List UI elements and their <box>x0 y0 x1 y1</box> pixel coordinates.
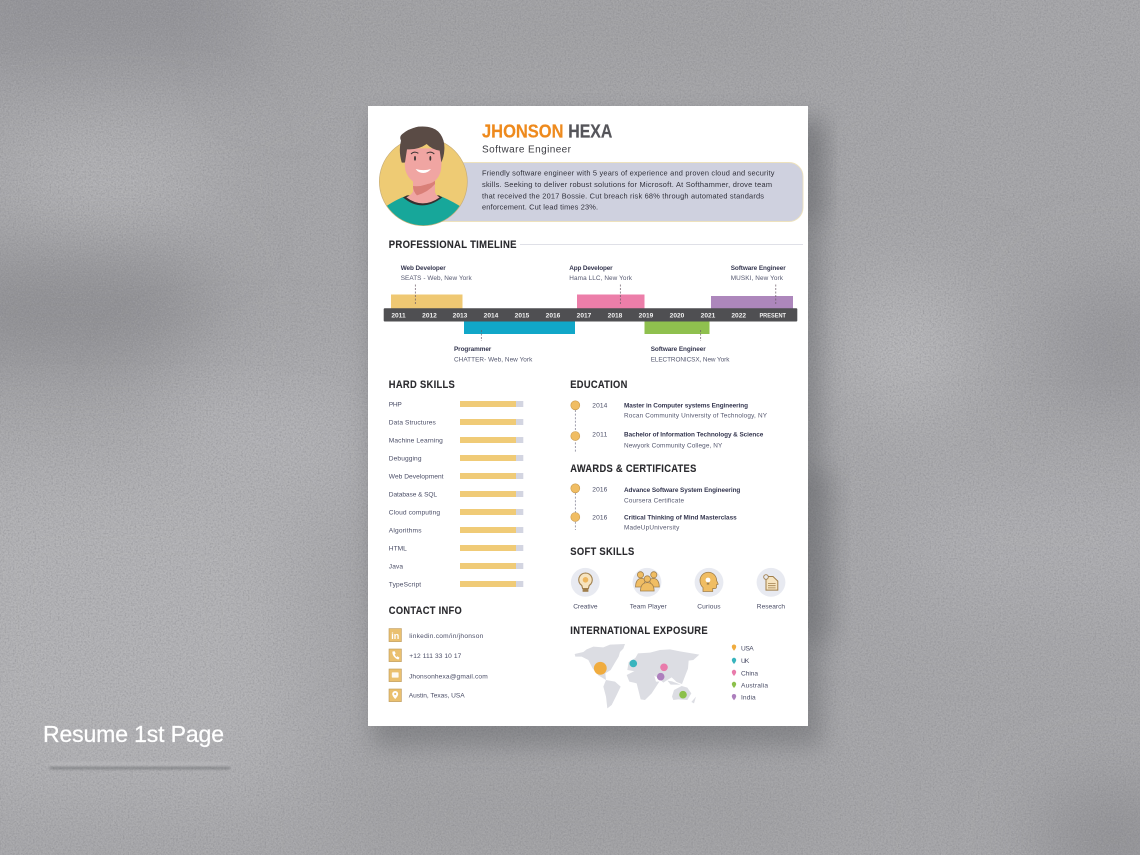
heading: hard skills: HARD SKILLS <box>389 379 455 391</box>
contact: location: Austin, Texas, USA <box>409 692 465 699</box>
awards list: MadeUpUniversity <box>624 525 680 532</box>
contact: phone: +12 111 33 10 17 <box>409 653 462 660</box>
education list: Bachelor of Information Technology & Science <box>624 432 764 439</box>
map legend: Australia <box>741 682 768 689</box>
hard skills bars: Web Development <box>389 473 444 480</box>
heading: soft skills: SOFT SKILLS <box>570 546 635 558</box>
awards list: Coursera Certificate <box>624 498 684 505</box>
skill: research <box>757 568 785 611</box>
summary text: skills. Seeking to deliver robust solutions for Microsoft. At Softhammer, drove team <box>482 180 772 189</box>
role: programmer: Programmer <box>454 346 492 353</box>
year axis: 2019 <box>639 312 654 319</box>
hard skills bars: Debugging <box>389 455 422 462</box>
hard skills bars: Java <box>389 563 403 570</box>
role: app developer: App Developer <box>569 265 613 272</box>
education list <box>571 401 768 452</box>
role: software engineer, Electronicsx <box>651 346 730 364</box>
education list: 2011 <box>592 432 608 439</box>
role: web developer <box>401 265 472 282</box>
year axis: 2016 <box>546 312 561 319</box>
education list: Newyork Community College, NY <box>624 442 723 449</box>
role: programmer: CHATTER- Web, New York <box>454 357 533 364</box>
year axis: 2022 <box>731 312 746 319</box>
job title: Software Engineer <box>482 145 572 156</box>
summary panel <box>430 162 803 222</box>
skill: creative: Creative <box>573 604 598 611</box>
year axis: PRESENT <box>759 313 786 319</box>
summary text: Friendly software engineer with 5 years of experience and proven cloud and security <box>482 168 775 178</box>
summary text <box>482 168 775 212</box>
skill: curious <box>695 568 723 611</box>
education list: Master in Computer systems Engineering <box>624 402 748 410</box>
year axis: 2015 <box>515 312 530 319</box>
contact: linkedin: linkedin.com/in/jhonson <box>409 633 484 640</box>
name: HEXA <box>568 122 612 142</box>
role: web developer: SEATS - Web, New York <box>401 275 472 282</box>
role: software engineer, Muski: MUSKI, New York <box>731 275 784 282</box>
education list: 2014 <box>592 402 608 410</box>
role: software engineer, Electronicsx: Software Engineer <box>651 346 706 353</box>
skill: team player: Team Player <box>630 604 667 611</box>
year axis: 2017 <box>577 312 592 319</box>
role: software engineer, Muski: Software Engineer <box>731 265 786 272</box>
awards list: Critical Thinking of Mind Masterclass <box>624 514 737 521</box>
contact: phone <box>389 649 462 662</box>
heading: international exposure: INTERNATIONAL EXPOSURE <box>570 625 708 637</box>
hard skills bars: Cloud computing <box>389 509 440 516</box>
name: JHONSON <box>482 122 564 142</box>
page shadow <box>372 118 836 746</box>
summary text: enforcement. Cut lead times 23%. <box>482 202 598 212</box>
heading: awards and certificates: AWARDS & CERTIFICATES <box>570 463 697 475</box>
role: app developer: Hama LLC, New York <box>569 275 633 282</box>
heading: professional timeline: PROFESSIONAL TIMELINE <box>389 239 517 251</box>
skill: research: Research <box>757 604 785 611</box>
skill: creative <box>571 568 600 611</box>
name <box>482 122 612 142</box>
contact: location <box>389 689 465 702</box>
heading: contact info: CONTACT INFO <box>389 605 462 617</box>
summary text: that received the 2017 Bossie. Cut breach risk 68% through automated standards <box>482 191 764 200</box>
awards list: 2016 <box>592 486 608 494</box>
map legend: USA <box>741 645 754 652</box>
hard skills bars: Algorithms <box>389 527 422 534</box>
year axis: 2020 <box>670 312 685 319</box>
hard skills bars <box>389 401 523 588</box>
awards list <box>571 484 740 532</box>
caption: Resume 1st Page <box>43 721 230 769</box>
hard skills bars: Machine Learning <box>389 437 443 444</box>
hard skills bars: HTML <box>389 545 407 552</box>
education list: Rocan Community University of Technology, NY <box>624 413 768 420</box>
contact: linkedin <box>389 629 484 642</box>
year axis: 2012 <box>422 312 437 319</box>
awards list: 2016 <box>592 514 608 521</box>
awards list: Advance Software System Engineering <box>624 487 740 494</box>
hard skills bars: Data Structures <box>389 419 437 426</box>
role: software engineer, Electronicsx: ELECTRONICSX, New York <box>651 357 730 364</box>
skill: team player <box>630 568 667 611</box>
hard skills bars: PHP <box>389 401 402 408</box>
contact: email <box>389 669 488 682</box>
map legend: India <box>741 694 756 701</box>
heading: education: EDUCATION <box>570 379 628 391</box>
panel: resume page <box>368 106 808 726</box>
map legend <box>732 644 768 701</box>
contact: linkedin: in <box>391 631 399 641</box>
contact: email: Jhonsonhexa@gmail.com <box>409 673 488 680</box>
map legend: China <box>741 670 758 677</box>
year axis: 2013 <box>453 312 468 319</box>
period bars <box>391 294 793 334</box>
skill: curious: Curious <box>697 604 721 611</box>
caption: Resume 1st Page: Resume 1st Page <box>43 721 224 747</box>
role: programmer <box>454 346 533 364</box>
map legend: UK <box>741 658 750 665</box>
hard skills bars: Database & SQL <box>389 491 437 498</box>
year axis: 2011 <box>391 312 406 319</box>
year axis: 2018 <box>608 312 623 319</box>
hard skills bars: TypeScript <box>389 581 421 588</box>
role: app developer <box>569 265 633 282</box>
world map <box>575 644 699 708</box>
timeline chart <box>384 265 797 364</box>
year axis: 2021 <box>701 312 716 319</box>
year axis: 2014 <box>484 312 499 319</box>
role: web developer: Web Developer <box>401 265 446 272</box>
role: software engineer, Muski <box>731 265 786 282</box>
year axis <box>384 308 797 322</box>
avatar <box>379 126 467 230</box>
